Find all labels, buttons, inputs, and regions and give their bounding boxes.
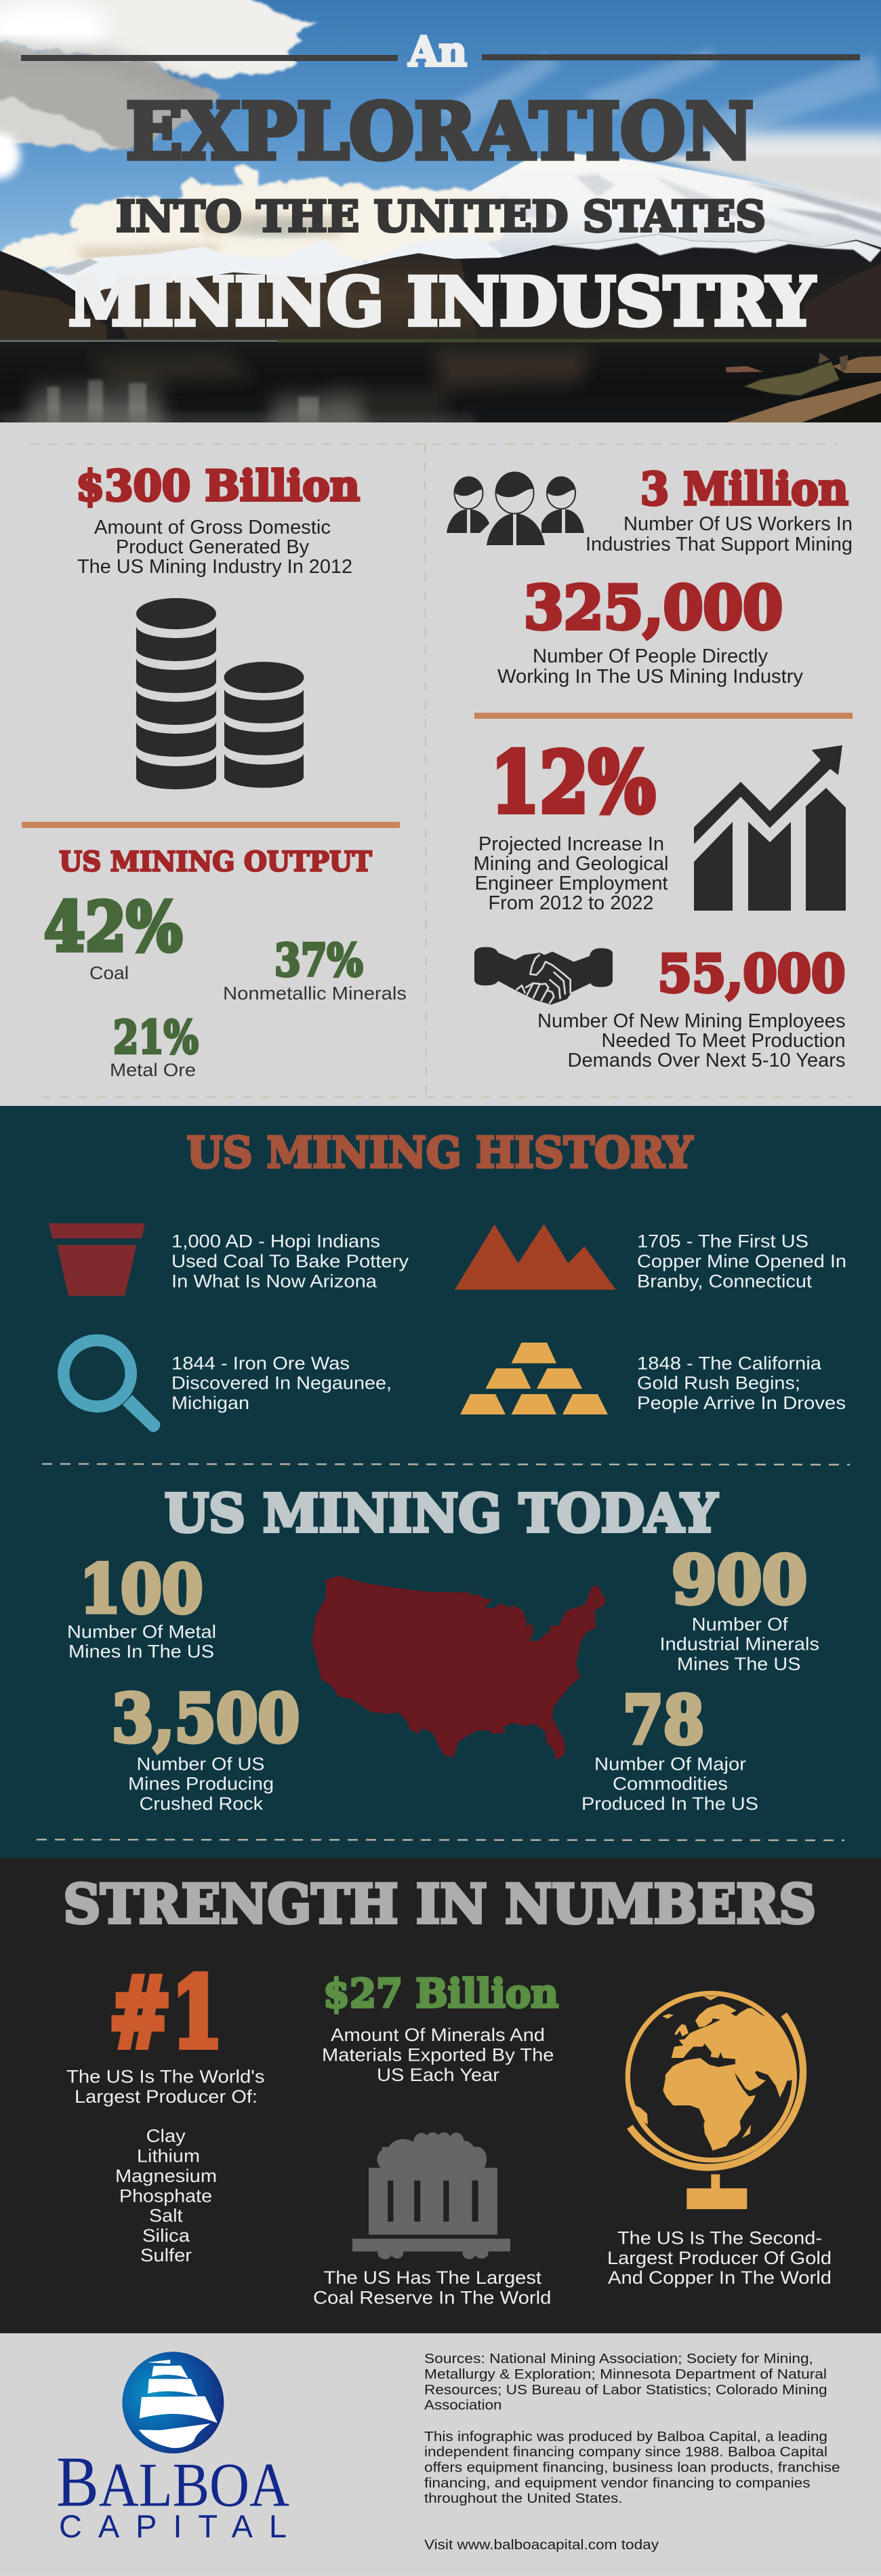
- text: 1,000 AD event: In What Is Now Arizona: [171, 1271, 377, 1291]
- stat: $300 Billion: Product Generated By: [116, 536, 309, 558]
- stat: 12%: Engineer Employment: [474, 873, 668, 894]
- icon: handshake: [474, 947, 613, 1005]
- stat: 3,500 crushed rock mines: [112, 1680, 300, 1814]
- divider: left orange rule: [22, 822, 400, 828]
- stat: 900 industrial minerals mines: Number Of: [692, 1614, 788, 1634]
- stat: 78 major commodities: Number Of Major: [594, 1753, 746, 1774]
- text: largest coal reserve: [313, 2267, 551, 2308]
- stat: 325,000: Number Of People Directly: [533, 646, 768, 667]
- stat: 12%: From 2012 to 2022: [488, 892, 653, 914]
- icon: coin stacks: [136, 598, 304, 789]
- stat: #1 producer: Phosphate: [119, 2186, 212, 2206]
- text: 1848 event: Gold Rush Begins;: [637, 1373, 800, 1393]
- stat: 900 industrial minerals mines: Industrial Minerals: [660, 1634, 819, 1654]
- stat: 100 metal mines: Mines In The US: [68, 1642, 214, 1662]
- icon: gold bars: [460, 1343, 608, 1414]
- text: 1844 event: Discovered In Negaunee,: [171, 1373, 392, 1393]
- stat: 42% coal: Coal: [89, 963, 129, 983]
- panel: header photo of mountain lake: [0, 0, 881, 448]
- text: sources: Association: [424, 2398, 501, 2413]
- text: sources: Resources; US Bureau of Labor Statistics; Colorado Mining: [424, 2383, 827, 2398]
- stat: $300 Billion: $300 Billion: [76, 461, 360, 511]
- logo: Balboa Capital: BALBOA: [56, 2442, 289, 2521]
- stat: 21% metal ore: Metal Ore: [110, 1060, 196, 1080]
- stat: 78 major commodities: Produced In The US: [581, 1794, 758, 1814]
- icon: three workers: [447, 472, 584, 545]
- icon: globe: [628, 1994, 803, 2209]
- title: Into The United States: INTO THE UNITED STATES: [116, 191, 766, 241]
- title: Exploration: EXPLORATION: [126, 86, 754, 176]
- stat: 78 major commodities: Commodities: [613, 1774, 728, 1794]
- stat: 55,000: [537, 944, 846, 1071]
- stat: 55,000: 55,000: [657, 944, 846, 1004]
- logo: Balboa Capital: [56, 2352, 289, 2544]
- stat: #1 producer: Magnesium: [115, 2166, 217, 2186]
- text: second-largest producer: Largest Producer Of Gold: [607, 2248, 832, 2268]
- icon: magnifying glass: [58, 1334, 160, 1432]
- stat: 900 industrial minerals mines: Mines The US: [677, 1654, 801, 1674]
- title: An: An: [408, 28, 467, 76]
- text: about Balboa Capital: independent financing company since 1988. Balboa Capital: [424, 2445, 827, 2460]
- panel: US mining history background: [0, 1106, 881, 1858]
- stat: 325,000: [497, 572, 803, 688]
- stat: 3,500 crushed rock mines: Mines Producing: [128, 1774, 274, 1794]
- stat: 325,000: Working In The US Mining Industry: [497, 666, 803, 688]
- stat: 100 metal mines: 100: [80, 1550, 203, 1627]
- stat: 900 industrial minerals mines: 900: [672, 1541, 807, 1619]
- stat: 12%: 12%: [491, 734, 655, 832]
- text: 1844 event: [171, 1353, 392, 1413]
- stat: $300 Billion: Amount of Gross Domestic: [94, 517, 331, 538]
- stat: 12%: Mining and Geological: [473, 853, 668, 875]
- stat: #1 producer: Lithium: [137, 2146, 200, 2166]
- text: sources: Sources: National Mining Association; Society for Mining,: [424, 2352, 813, 2366]
- text: 1848 event: People Arrive In Droves: [637, 1393, 846, 1413]
- stat: 55,000: Number Of New Mining Employees: [537, 1010, 846, 1032]
- stat: #1 producer: [66, 1955, 264, 2265]
- stat: #1 producer: Sulfer: [140, 2245, 192, 2265]
- stat: $27 Billion exports: [322, 1970, 558, 2085]
- stat: $300 Billion: The US Mining Industry In 2012: [77, 556, 352, 578]
- text: sources: [424, 2352, 827, 2413]
- stat: 3 Million: Industries That Support Mining: [586, 534, 853, 555]
- text: 1844 event: 1844 - Iron Ore Was: [171, 1353, 350, 1373]
- stat: $27 Billion exports: Materials Exported By The: [322, 2045, 554, 2065]
- text: second-largest producer: The US Is The Second-: [617, 2227, 822, 2248]
- stat: 21% metal ore: 21%: [113, 1010, 199, 1064]
- stat: $27 Billion exports: $27 Billion: [323, 1970, 558, 2017]
- stat: $27 Billion exports: US Each Year: [377, 2065, 499, 2085]
- stat: 55,000: Needed To Meet Production: [602, 1030, 846, 1052]
- panel: strength in numbers background: [0, 1858, 881, 2333]
- stat: 21% metal ore: [110, 1010, 199, 1080]
- stat: 37% nonmetallic minerals: [223, 934, 407, 1004]
- text: about Balboa Capital: financing, and equipment vendor financing to companies: [424, 2476, 811, 2491]
- text: 1,000 AD event: 1,000 AD - Hopi Indians: [171, 1231, 380, 1252]
- stat: 12%: [473, 734, 668, 914]
- icon: clay pot: [49, 1223, 145, 1296]
- text: 1705 event: [637, 1231, 846, 1291]
- text: 1848 event: [637, 1353, 846, 1413]
- title: An: [21, 28, 860, 76]
- text: 1705 event: Copper Mine Opened In: [637, 1251, 846, 1271]
- icon: copper mountains: [455, 1224, 616, 1290]
- stat: 55,000: Demands Over Next 5-10 Years: [568, 1050, 846, 1071]
- text: second-largest producer: And Copper In The World: [608, 2267, 832, 2288]
- stat: 900 industrial minerals mines: [660, 1541, 819, 1674]
- text: about Balboa Capital: [424, 2430, 840, 2506]
- stat: 78 major commodities: 78: [623, 1682, 704, 1759]
- stat: #1 producer: Silica: [142, 2225, 190, 2246]
- stat: #1 producer: Largest Producer Of:: [75, 2086, 258, 2107]
- text: 1844 event: Michigan: [171, 1393, 249, 1413]
- divider: right orange rule: [474, 713, 853, 719]
- map: continental United States: [312, 1576, 606, 1760]
- stat: 325,000: 325,000: [524, 572, 783, 643]
- stat: 37% nonmetallic minerals: 37%: [274, 934, 363, 987]
- text: 1705 event: Branby, Connecticut: [637, 1271, 813, 1291]
- stat: 78 major commodities: [581, 1682, 758, 1814]
- panel: footer background: [0, 2333, 881, 2575]
- title: Mining Industry: MINING INDUSTRY: [68, 263, 816, 340]
- panel: key statistics frame: [30, 444, 852, 1097]
- stat: #1 producer: Clay: [146, 2126, 186, 2146]
- icon: rising chart with arrow: [694, 745, 846, 911]
- stat: 3 Million: 3 Million: [640, 463, 848, 515]
- stat: #1 producer: #1: [109, 1955, 223, 2069]
- text: website call to action: Visit www.balboacapital.com today: [424, 2537, 659, 2552]
- stat: 3,500 crushed rock mines: Crushed Rock: [140, 1794, 264, 1814]
- stat: 3,500 crushed rock mines: 3,500: [112, 1680, 300, 1757]
- text: largest coal reserve: The US Has The Largest: [324, 2267, 542, 2288]
- stat: 100 metal mines: [67, 1550, 216, 1662]
- stat: 3,500 crushed rock mines: Number Of US: [137, 1753, 264, 1774]
- stat: 42% coal: 42%: [44, 888, 182, 967]
- text: about Balboa Capital: throughout the United States.: [424, 2491, 623, 2506]
- heading: US Mining Today: US MINING TODAY: [165, 1484, 718, 1545]
- text: about Balboa Capital: This infographic was produced by Balboa Capital, a leading: [424, 2430, 827, 2444]
- heading: US Mining History: US MINING HISTORY: [187, 1128, 693, 1178]
- stat: 37% nonmetallic minerals: Nonmetallic Minerals: [223, 983, 407, 1004]
- stat: $27 Billion exports: Amount Of Minerals And: [331, 2025, 545, 2045]
- stat: 100 metal mines: Number Of Metal: [67, 1622, 216, 1642]
- stat: #1 producer: The US Is The World's: [66, 2067, 264, 2087]
- text: 1848 event: 1848 - The California: [637, 1353, 821, 1373]
- text: sources: Metallurgy & Exploration; Minnesota Department of Natural: [424, 2367, 827, 2382]
- text: largest coal reserve: Coal Reserve In The World: [313, 2288, 551, 2308]
- stat: 3 Million: Number Of US Workers In: [623, 513, 853, 535]
- stat: #1 producer: Salt: [149, 2205, 183, 2225]
- logo: Balboa Capital: CAPITAL: [59, 2508, 287, 2544]
- stat: 3 Million: [586, 463, 853, 555]
- text: 1,000 AD event: [171, 1231, 409, 1291]
- stat: 12%: Projected Increase In: [478, 833, 664, 855]
- text: 1,000 AD event: Used Coal To Bake Pottery: [171, 1251, 409, 1271]
- text: second-largest producer: [607, 2227, 832, 2288]
- icon: coal cart: [352, 2133, 510, 2259]
- heading: US Mining Output: US MINING OUTPUT: [59, 846, 372, 878]
- heading: Strength In Numbers: STRENGTH IN NUMBERS: [64, 1873, 816, 1935]
- text: about Balboa Capital: offers equipment financing, business loan products, franchise: [424, 2461, 840, 2476]
- text: 1705 event: 1705 - The First US: [637, 1231, 808, 1252]
- stat: $300 Billion: [76, 461, 360, 578]
